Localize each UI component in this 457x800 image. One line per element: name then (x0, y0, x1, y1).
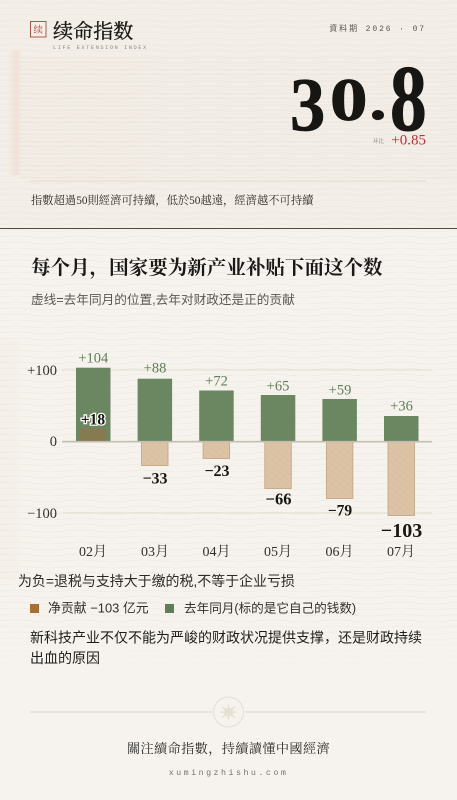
panel: header (30, 20, 427, 207)
month axis labels: 02月 (79, 544, 107, 560)
month axis labels: 03月 (141, 544, 169, 560)
net contribution value labels: −33 (142, 470, 168, 488)
change from previous period: +0.85 (391, 132, 426, 148)
net contribution value labels: −79 (328, 502, 352, 520)
data period: 資料期 2026 · 07 (329, 23, 426, 34)
conclusion text: 新科技产业不仅不能为严峻的财政状况提供支撑，还是财政持续 (30, 630, 422, 646)
call to action: 關注續命指數，持續讀懂中國經濟 (127, 740, 330, 757)
last-year value labels (78, 350, 413, 414)
y axis labels (27, 363, 57, 522)
change from previous period: 环比 (373, 137, 384, 145)
logo seal: 续 (33, 24, 43, 36)
last-year value labels: +104 (78, 350, 109, 366)
last-year value labels: +65 (267, 378, 289, 394)
legend item: net contribution: 净贡献 −103 亿元 (48, 600, 149, 616)
change from previous period (373, 132, 426, 148)
note: meaning of negative values: 为负=退税与支持大于缴的税,不等于企业亏损 (18, 573, 295, 589)
conclusion text: 出血的原因 (30, 650, 100, 666)
net contribution value labels: −103 (381, 520, 422, 542)
bar chart (27, 350, 432, 560)
title: brand name: 续命指数 (53, 20, 133, 43)
february positive net bar (80, 428, 106, 442)
y axis labels: 0 (50, 434, 57, 450)
icon: ornamental sun seal (214, 697, 244, 727)
last-year value labels: +59 (329, 382, 351, 398)
logo seal (30, 22, 46, 37)
net contribution value labels: −23 (204, 463, 230, 480)
headline index value: 0 (330, 66, 367, 133)
month axis labels: 05月 (264, 544, 292, 560)
chart subtitle: 虚线=去年同月的位置,去年对财政还是正的贡献 (31, 292, 295, 307)
headline index value: 8 (390, 47, 427, 151)
net contribution value labels (81, 412, 422, 542)
headline index value: . (369, 66, 387, 133)
conclusion text (30, 630, 422, 666)
heading: 每个月，国家要为新产业补贴下面这个数 (31, 256, 383, 279)
month axis labels: 04月 (202, 544, 230, 560)
month axis labels (79, 544, 415, 560)
y axis labels: −100 (27, 506, 57, 522)
footer (30, 697, 426, 778)
last-year green bars (76, 368, 418, 442)
website: xumingzhishu.com (169, 768, 288, 778)
last-year value labels: +88 (144, 360, 166, 376)
headline index value (290, 47, 427, 151)
subtitle: english brand: LIFE EXTENSION INDEX (53, 45, 148, 51)
last-year value labels: +36 (390, 398, 413, 414)
last-year value labels: +72 (205, 374, 228, 390)
net contribution tan bars (142, 442, 414, 516)
net contribution value labels: −66 (266, 490, 291, 508)
month axis labels: 07月 (387, 544, 415, 560)
legend (30, 600, 356, 616)
legend item: same month last year: 去年同月(标的是它自己的钱数) (184, 600, 356, 616)
y axis labels: +100 (27, 363, 57, 379)
month axis labels: 06月 (326, 544, 354, 560)
net contribution value labels: +18 (81, 412, 105, 428)
headline index value: 3 (290, 63, 325, 147)
index explanation: 指數超過50則經濟可持續，低於50越遠，經濟越不可持續 (31, 193, 314, 207)
